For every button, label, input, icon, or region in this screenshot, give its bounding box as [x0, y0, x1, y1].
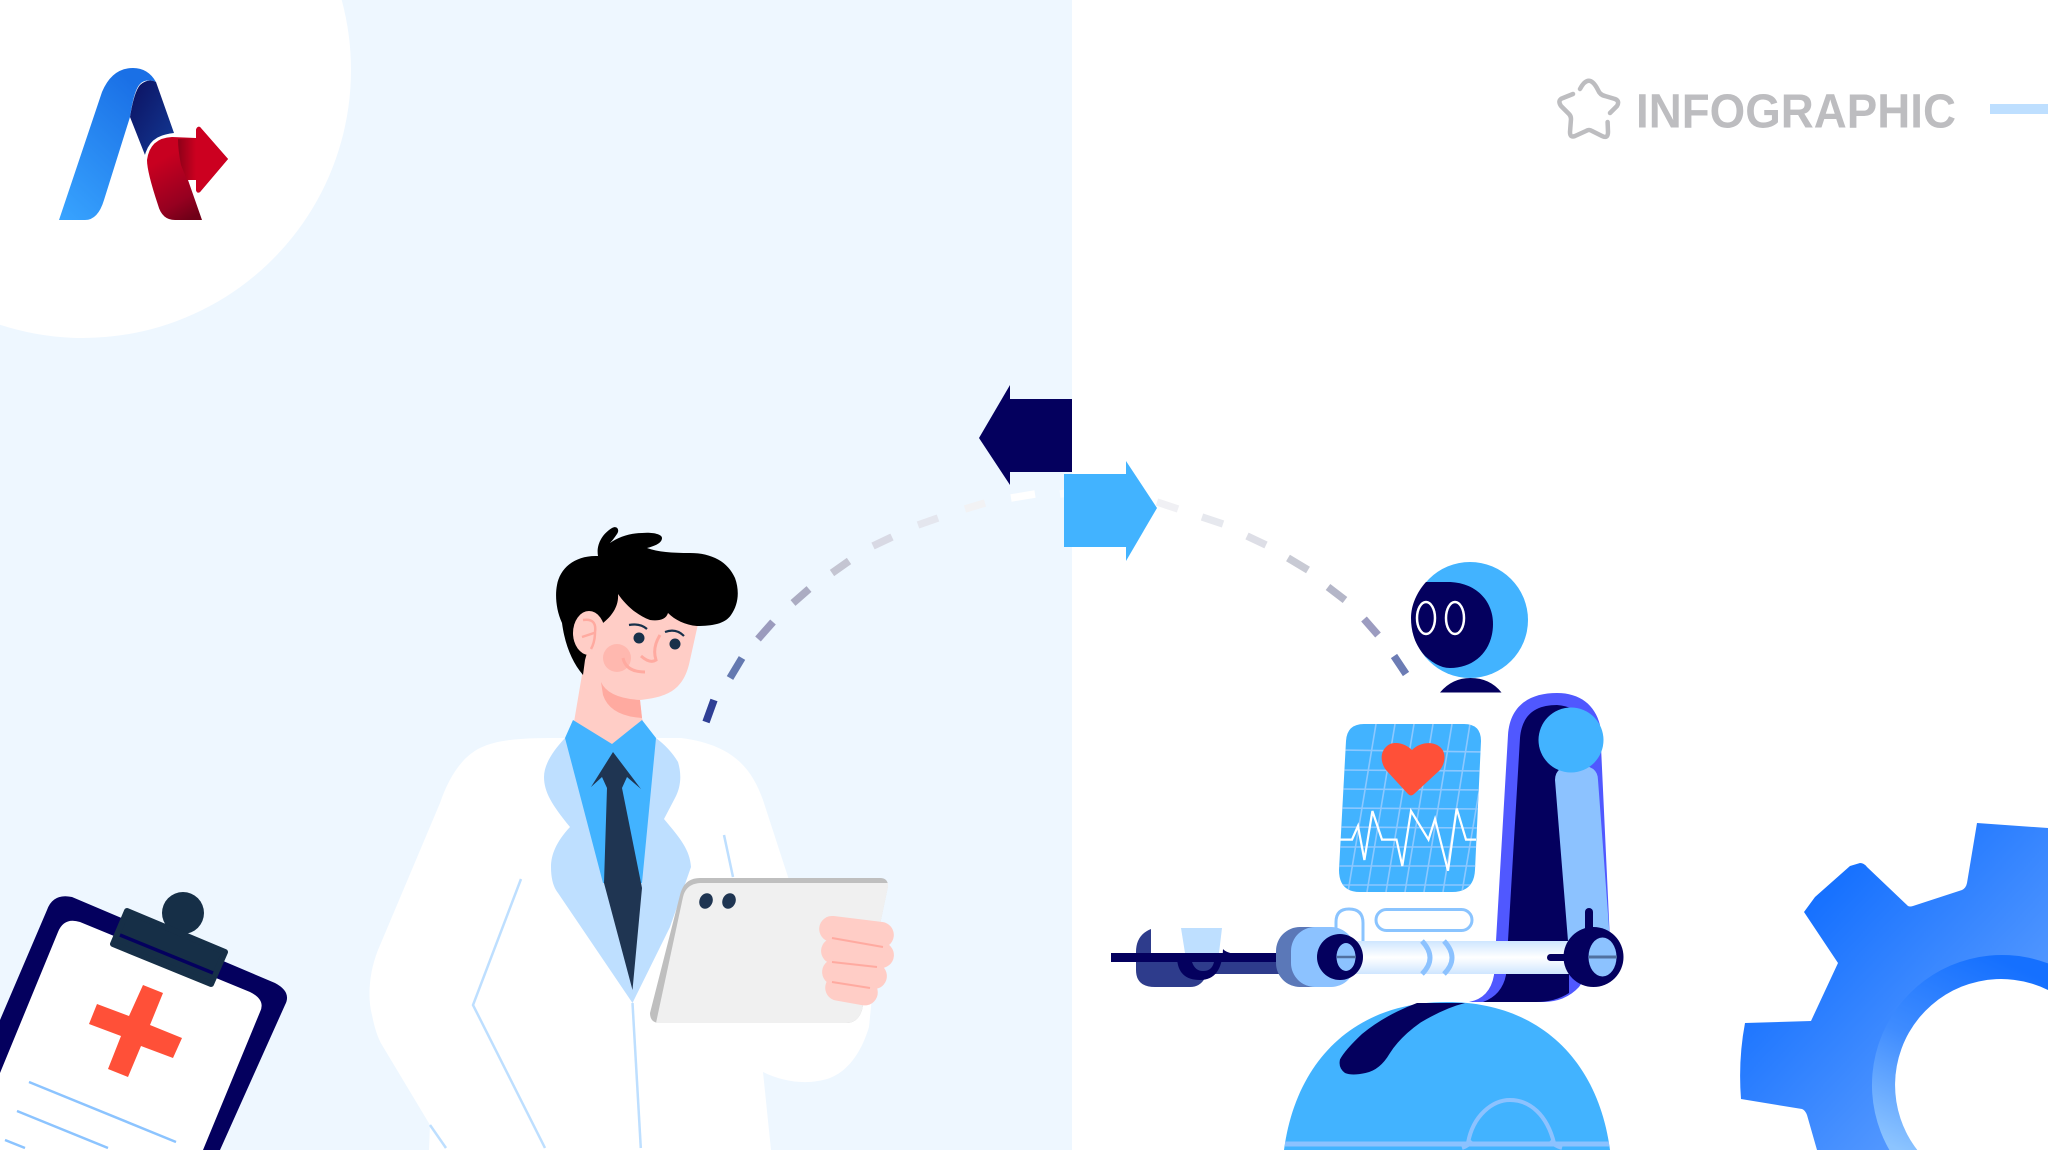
upper arm — [1555, 765, 1610, 941]
illustration: robot — [1111, 562, 1624, 1150]
nose and smile — [623, 635, 660, 672]
monitor screen — [1335, 724, 1485, 892]
elbow joint left — [1317, 934, 1363, 980]
arc: dashed path from doctor — [706, 493, 1068, 722]
icon: logo — [59, 68, 228, 220]
arc: dashed path from robot — [1157, 502, 1406, 674]
hand — [818, 914, 895, 1007]
jaw shadow — [601, 682, 642, 718]
icon: gear — [1740, 823, 2048, 1150]
tie — [591, 752, 642, 990]
panel: left background — [0, 0, 1072, 1150]
hair — [556, 527, 738, 675]
robot face — [1411, 582, 1493, 668]
arm column inner — [1483, 705, 1585, 1002]
illustration: doctor — [370, 527, 895, 1150]
tablet — [650, 878, 888, 1023]
robot head — [1412, 562, 1528, 678]
eyes — [634, 632, 680, 650]
eyebrows — [629, 624, 684, 636]
robot eyes — [1417, 602, 1464, 634]
head and neck — [574, 590, 700, 755]
shirt collar — [565, 720, 656, 883]
clipboard board — [0, 896, 287, 1150]
robot neck — [1440, 678, 1502, 692]
ear — [573, 611, 605, 655]
clip — [113, 892, 225, 984]
shoulder joint — [1538, 708, 1604, 772]
arrow: light blue pointing right — [1064, 461, 1157, 561]
coat — [370, 738, 872, 1150]
forearm tube — [1345, 941, 1570, 974]
title text: INFOGRAPHIC — [1636, 86, 1956, 138]
ecg line — [1340, 808, 1476, 871]
logo circle backdrop — [0, 0, 351, 338]
arm column outer — [1469, 693, 1610, 1002]
cheek — [603, 644, 631, 672]
control pills — [1336, 909, 1472, 941]
icon: clipboard — [0, 892, 287, 1150]
coat seams — [430, 835, 733, 1148]
accent bar — [1990, 104, 2048, 114]
wrist cuff — [1276, 927, 1355, 987]
arrow: navy pointing left — [979, 385, 1072, 485]
tray and cup — [1111, 928, 1313, 987]
elbow joint right — [1547, 908, 1624, 987]
lapels — [544, 738, 691, 1003]
icon: star outline — [1559, 81, 1618, 137]
clipboard paper — [0, 921, 262, 1150]
text lines — [5, 1082, 176, 1148]
heading: infographic label — [1559, 81, 1956, 138]
heart icon — [1382, 743, 1444, 796]
dome base — [1284, 1002, 1610, 1150]
medical cross — [89, 985, 182, 1077]
